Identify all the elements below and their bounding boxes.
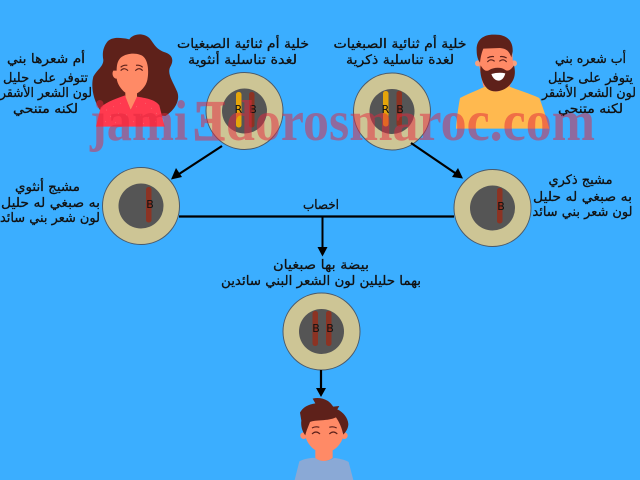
text: female gamete description: لون شعر بني سائد: [0, 211, 100, 226]
text: male parent cell caption: خلية أم ثنائية الصبغيات: [334, 35, 466, 52]
text: male parent cell caption: [334, 35, 466, 68]
text: father description: لون الشعر الأشقر: [541, 84, 636, 101]
text: fertilisation label: اخصاب: [303, 198, 339, 213]
watermark: dorosmaroc.com: [226, 90, 595, 153]
text: mother description: لكنه متنحي: [13, 102, 78, 117]
text: female gamete description: به صبغي له حليل: [1, 196, 100, 211]
cell: female gamete: B: [146, 198, 154, 211]
watermark: [89, 90, 595, 153]
cell: fertilised egg: B: [312, 322, 320, 335]
cell: female parent cell: R: [235, 103, 243, 116]
cell: male parent cell: R: [382, 103, 390, 116]
watermark: E: [193, 90, 225, 153]
text: father description: [541, 50, 636, 117]
icon: mother portrait: [92, 34, 178, 127]
text: father description: أب شعره بني: [555, 50, 626, 67]
watermark: jami: [89, 90, 188, 153]
cell: female gamete: [102, 168, 180, 244]
text: female gamete description: مشيج أنثوي: [15, 178, 80, 195]
icon: father portrait: [456, 35, 549, 129]
text: mother description: تتوفر على حليل: [3, 71, 88, 86]
arrow: egg to child: [316, 370, 326, 397]
cell: male gamete: B: [497, 200, 505, 213]
cell: female parent cell: [206, 72, 283, 150]
text: female parent cell caption: خلية أم ثنائية الصبغيات: [177, 35, 309, 52]
text: male gamete description: به صبغي له حليل: [533, 190, 632, 205]
text: male gamete description: مشيج ذكري: [548, 173, 612, 188]
text: female parent cell caption: [177, 35, 309, 68]
cell: male parent cell: [354, 73, 430, 150]
arrow: female cell to gamete: [171, 146, 222, 180]
text: male parent cell caption: لغدة تناسلية ذكرية: [346, 53, 454, 68]
icon: child portrait: [295, 398, 353, 480]
cell: female parent cell: B: [249, 103, 257, 116]
text: egg description: [221, 258, 421, 289]
text: father description: يتوفر على حليل: [548, 71, 633, 86]
text: female gamete description: [0, 178, 100, 226]
text: father description: لكنه متنحي: [558, 102, 623, 117]
arrow: fertilisation line: [179, 216, 454, 256]
cell: fertilised egg: [283, 293, 360, 370]
cell: male parent cell: B: [396, 103, 404, 116]
text: mother description: [0, 50, 92, 117]
cell: male gamete: [454, 170, 531, 246]
cell: fertilised egg: B: [326, 322, 334, 335]
arrow: male cell to gamete: [411, 143, 463, 178]
text: female parent cell caption: لغدة تناسلية أنثوية: [188, 51, 297, 68]
text: mother description: أم شعرها بني: [7, 50, 85, 67]
text: male gamete description: لون شعر بني سائد: [532, 205, 632, 220]
text: male gamete description: [532, 173, 632, 220]
text: egg description: بهما حليلين لون الشعر البني سائدين: [221, 274, 421, 289]
text: egg description: بيضة بها صبغيان: [273, 258, 369, 273]
text: mother description: لون الشعر الأشقر: [0, 84, 92, 101]
